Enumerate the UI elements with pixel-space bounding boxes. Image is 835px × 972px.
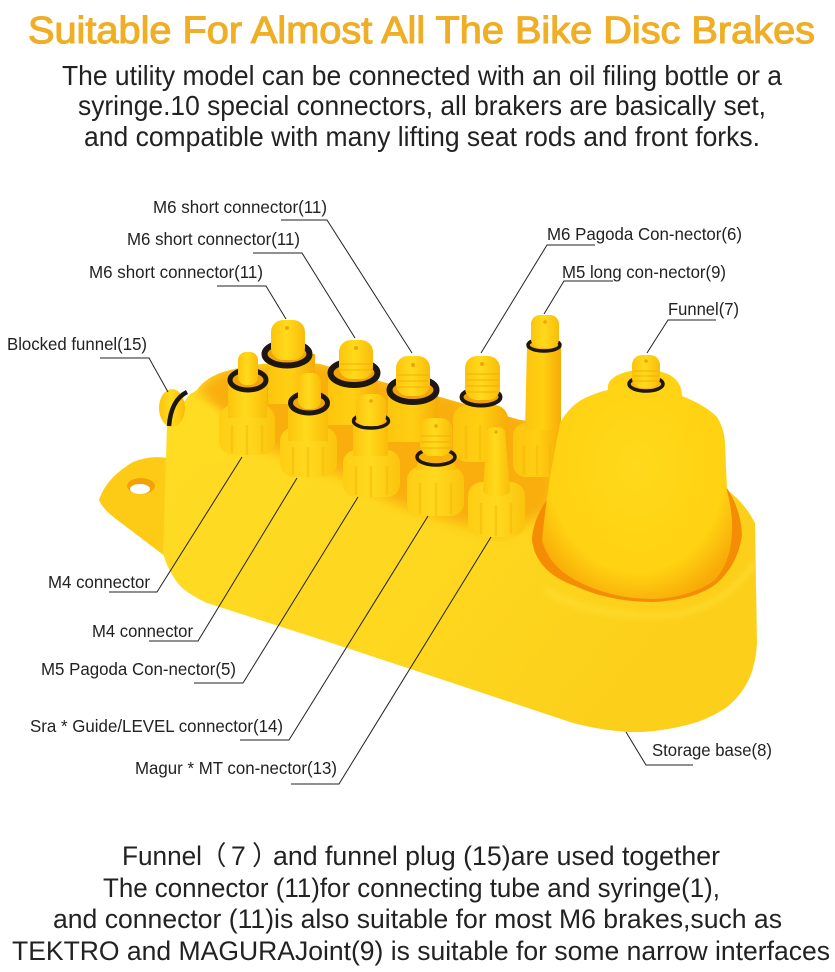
- intro paragraph: The utility model can be connected with an oil filing bottle or a: [62, 60, 783, 91]
- connector: M6 pagoda: [453, 356, 508, 462]
- product illustration: yellow storage base with connectors: [99, 315, 757, 732]
- label: storage base: [626, 732, 772, 765]
- label: M4 connector right: [92, 478, 297, 641]
- label: Magur MT connector: Magur * MT con-nector(13): [135, 758, 337, 778]
- connector: M4 right: [280, 373, 337, 477]
- label: Sra Guide/LEVEL connector: [30, 516, 428, 740]
- intro paragraph: syringe.10 special connectors, all brakers are basically set,: [78, 90, 766, 121]
- label: M5 long connector: M5 long con-nector(9): [562, 262, 726, 282]
- bottom description: The connector (11)for connecting tube and syringe(1),: [103, 873, 720, 903]
- connector: M4 left: [219, 352, 275, 455]
- label: M4 connector left: M4 connector: [48, 572, 150, 592]
- connector: Magura MT: [468, 427, 525, 537]
- label: M6 short connector top: [153, 197, 412, 353]
- label: funnel: [647, 299, 739, 353]
- connector: M5 long: [513, 315, 562, 477]
- funnel recess: [532, 488, 742, 602]
- label: M4 connector right: M4 connector: [92, 621, 193, 641]
- title: Suitable For Almost All The Bike Disc Brakes: [28, 10, 815, 52]
- intro paragraph: and compatible with many lifting seat rods and front forks.: [84, 121, 760, 152]
- label: M6 pagoda connector: M6 Pagoda Con-nector(6): [547, 224, 742, 244]
- bottom description: [12, 841, 830, 966]
- funnel: [542, 355, 732, 599]
- bottom description: Funnel: [122, 841, 202, 871]
- label: M5 long connector: [544, 262, 726, 314]
- label: M6 short connector middle: [127, 229, 355, 338]
- connector: M5 pagoda: [343, 394, 400, 497]
- label: M6 short connector lower: [89, 262, 286, 319]
- connector: Sram Guide/LEVEL: [407, 418, 464, 516]
- label: Magur MT connector: [135, 537, 491, 784]
- label: M6 short connector lower: M6 short connector(11): [89, 262, 263, 282]
- bottom description: ）: [252, 841, 278, 871]
- label: storage base: Storage base(8): [652, 740, 772, 760]
- label: funnel: Funnel(7): [668, 299, 739, 319]
- bottom description: （: [200, 841, 226, 871]
- connector: back row 2: [328, 340, 378, 425]
- label: M6 pagoda connector: [481, 224, 742, 353]
- label: M6 short connector top: M6 short connector(11): [153, 197, 327, 217]
- label: M4 connector left: [48, 457, 242, 592]
- bottom description: and funnel plug (15)are used together: [273, 841, 720, 871]
- bottom description: TEKTRO and MAGURAJoint(9) is suitable for some narrow interfaces: [12, 936, 830, 966]
- label: blocked funnel: Blocked funnel(15): [7, 334, 147, 354]
- storage base: [99, 362, 757, 732]
- bottom description: and connector (11)is also suitable for most M6 brakes,such as: [53, 904, 782, 934]
- connector: back row 1: [264, 320, 315, 404]
- label: M6 short connector middle: M6 short connector(11): [127, 229, 300, 249]
- blocked funnel plug: [159, 389, 187, 427]
- intro paragraph: [62, 60, 783, 152]
- bottom description: 7: [231, 841, 246, 871]
- label: Sra Guide/LEVEL connector: Sra * Guide/LEVEL connector(14): [30, 716, 283, 736]
- label: M5 pagoda connector: M5 Pagoda Con-nector(5): [41, 659, 236, 679]
- mounting ear: [99, 457, 170, 560]
- label: M5 pagoda connector: [41, 497, 358, 683]
- label: blocked funnel: [7, 334, 168, 392]
- connector: back row 3: [388, 356, 438, 442]
